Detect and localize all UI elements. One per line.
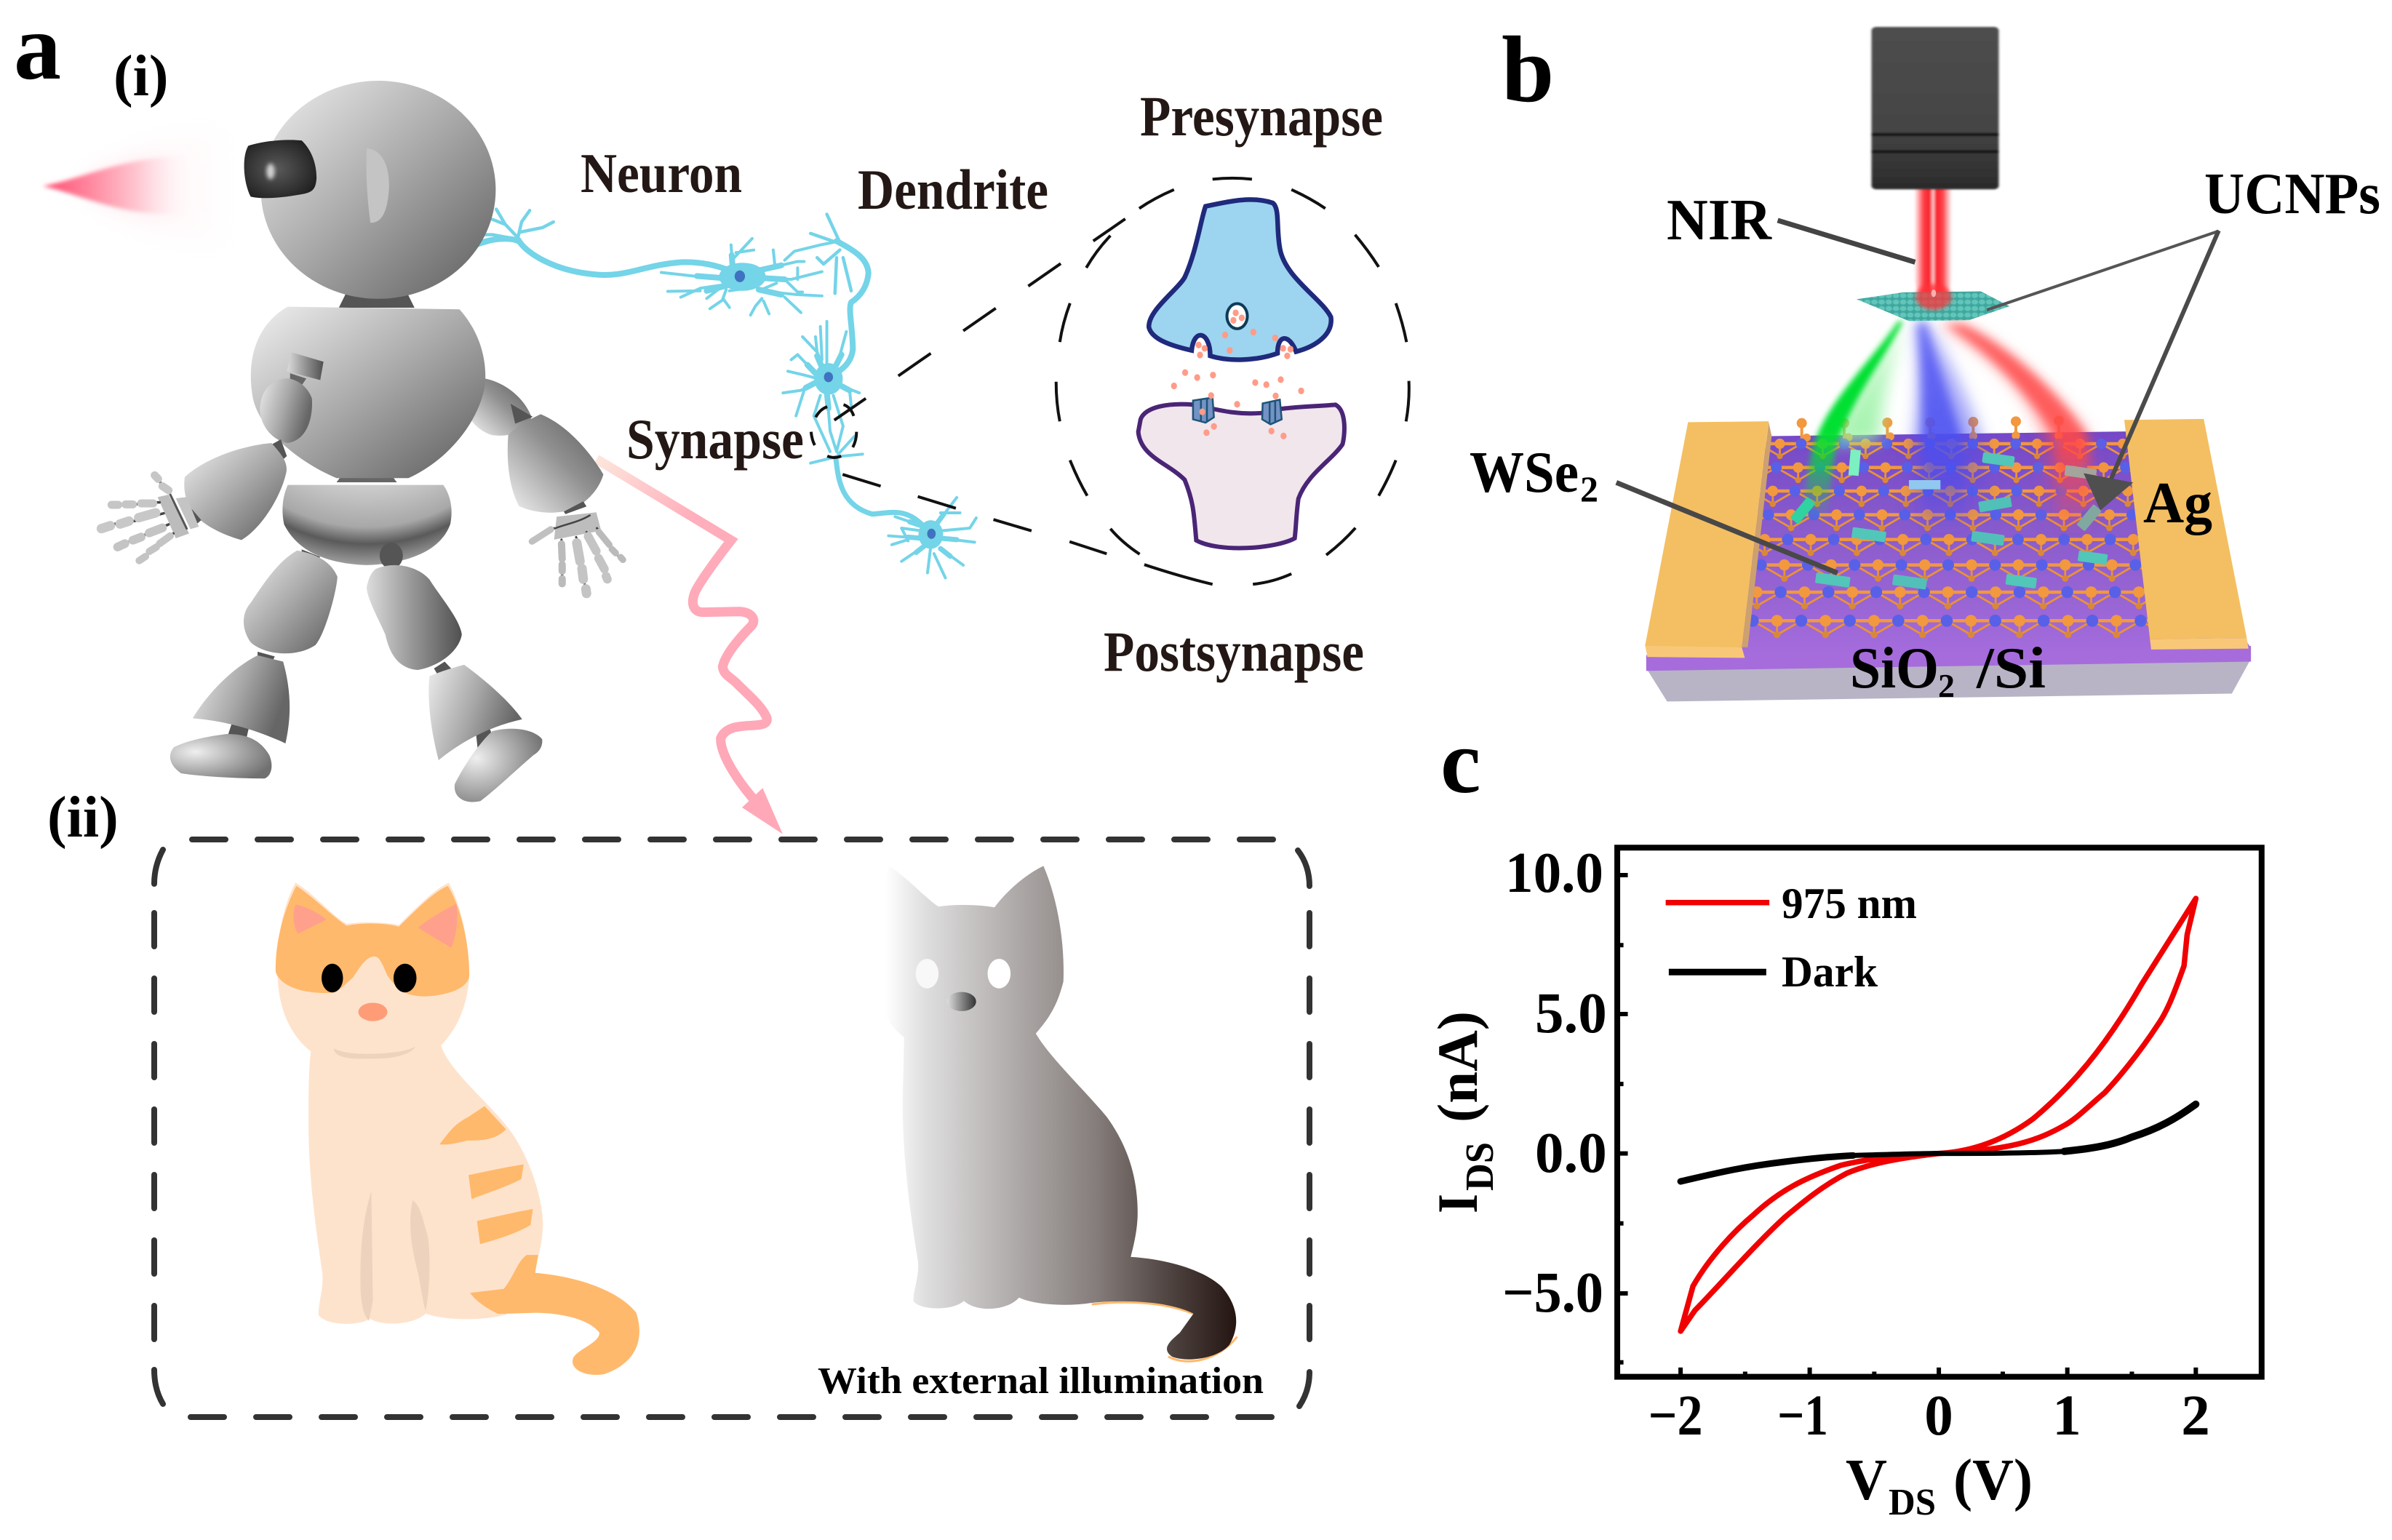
cat chin and leg shading [334,1046,430,1321]
grey silicon block [1646,659,2251,701]
robot neck [339,294,415,308]
substrate label: SiO [1850,637,1939,701]
cat eyes [322,964,343,992]
y axis tick labels: 10.0 [1505,842,1603,905]
axis ticks [1619,875,2196,1375]
y axis title: DS [1457,1142,1502,1191]
first neuron nucleus [735,271,745,282]
right Ag electrode [2124,419,2249,650]
cat body [277,882,543,1324]
neurotransmitters [1171,309,1304,439]
sub-panel label (i): (i) [113,44,169,108]
robot right foot [455,729,542,802]
panel label c: c [1440,712,1480,813]
axon from robot head [476,239,730,275]
legend black line [1669,969,1766,976]
green emission core [1802,322,1903,522]
robot left upper arm [260,378,312,443]
y axis tick labels: 0.0 [1535,1122,1607,1185]
robot left ankle [228,722,250,741]
x axis tick labels: 0 [1924,1384,1953,1448]
robot right hand [532,501,623,594]
objective lens [1872,27,1998,189]
Ag label: Ag [2143,471,2212,535]
purple oxide top [1646,431,2251,658]
coloured emission beams [1802,322,2095,533]
orange rim under tail [1092,1302,1237,1361]
postsynaptic terminal [1139,404,1344,548]
x axis title: V [1846,1448,1887,1512]
NIR laser beam [1914,188,1952,302]
wavy pink light arrow [597,459,783,834]
robot waist joint [337,476,396,482]
dark curve [1681,1104,2196,1181]
third neuron dendrites [888,498,976,578]
cat tail [470,1255,639,1375]
y axis title: I [1426,1194,1489,1213]
substrate label: 2 [1938,667,1955,704]
x axis tick labels [1649,1384,2210,1448]
synapse zoom diagram [811,178,1409,584]
robot left shoulder [287,352,324,380]
axon three [836,459,928,531]
robot ear [367,148,389,223]
presynaptic terminal [1149,199,1331,359]
synapse label: Synapse [626,407,804,471]
UCNP nanorods on lattice [1790,450,2108,589]
dashed rounded box [154,839,1309,1417]
vesicle [1227,303,1248,329]
panel label b: b [1502,17,1554,122]
third neuron body [908,514,957,556]
left Ag electrode [1645,421,1771,658]
red emission halo [1940,324,2095,533]
975 nm curve [1681,898,2196,1331]
top apical atoms [1802,420,2059,444]
legend text Dark: Dark [1782,948,1878,996]
cat nose [359,1002,388,1021]
x axis tick labels: 1 [2052,1384,2081,1448]
robot left forearm [184,443,287,540]
WSe2 label: 2 [1580,468,1598,509]
robot left shin [193,655,290,743]
y axis tick labels [1502,842,1607,1325]
illuminated grey cat [872,866,1237,1361]
substrate label: /Si [1976,637,2046,701]
axon branches near head [479,210,554,245]
robot head [261,81,495,299]
cat ears [293,903,457,948]
receptors [1193,398,1282,424]
UCNP pointer to sheet [1987,231,2219,310]
illumination caption: With external illumination [818,1360,1264,1402]
robot left hand [101,475,202,561]
second neuron dendrites [783,322,863,463]
grey cat nose [947,992,976,1011]
WSe2 pointer [1616,482,1838,573]
neuron label: Neuron [581,142,742,204]
y axis tick labels: −5.0 [1502,1261,1603,1325]
x axis title: DS [1889,1482,1936,1523]
small dashed circle on neuron [811,404,856,458]
robot [170,81,603,802]
x axis tick labels: −1 [1777,1384,1828,1448]
x axis tick labels: −2 [1649,1384,1702,1448]
laser spot on sheet [1915,284,1952,310]
x axis title [1846,1448,2033,1523]
orange cat [276,882,639,1375]
plot frame [1617,847,2262,1377]
UCNP arrow to rod [2084,231,2219,511]
presynapse label: Presynapse [1140,84,1383,148]
axon two [830,241,869,376]
x axis tick labels: 2 [2181,1384,2210,1448]
lattice rows [1690,439,2211,638]
IV chart [1617,847,2262,1377]
first neuron body [697,255,785,295]
red emission core [1944,324,2092,533]
robot waist [282,485,452,565]
green emission halo [1831,322,1902,446]
dendrite junction branches [810,215,851,293]
grey cat eyes [916,959,938,989]
y axis tick labels: 5.0 [1535,982,1607,1045]
postsynapse label: Postsynapse [1104,620,1364,683]
legend text 975 nm: 975 nm [1782,879,1917,927]
light beam from robot eye [43,131,232,247]
WSe2 lattice [1690,415,2211,638]
robot knee links [258,652,451,677]
visor highlight [266,164,275,179]
sub-panel label (ii): (ii) [47,786,119,850]
first neuron dendrites [661,239,840,315]
robot right upper arm [471,378,532,436]
UCNPs label: UCNPs [2204,162,2380,226]
cat stripes [439,1106,533,1244]
robot torso [251,307,485,478]
third neuron nucleus [928,529,936,539]
y axis title: (nA) [1426,1011,1489,1122]
y axis title [1426,1011,1502,1213]
NIR pointer [1778,220,1915,262]
cat head markings [276,886,469,997]
second neuron body [806,354,850,408]
device base layers [1646,431,2251,701]
second neuron nucleus [824,372,833,382]
zoom guide dashed lines [834,219,1213,584]
legend red line [1666,900,1769,906]
robot visor [244,140,316,198]
blue emission core [1918,322,1964,533]
robot hip joints [380,543,403,569]
robot right ankle [476,729,494,752]
robot left thigh [244,551,338,653]
purple oxide side [1646,646,2251,671]
large dashed circle [1056,178,1409,584]
substrate label [1850,637,2046,704]
robot right thigh [367,565,462,670]
NIR label: NIR [1667,188,1772,252]
x axis title: (V) [1953,1448,2033,1512]
device optics and electrodes [1616,27,2249,658]
robot right shin [428,665,522,760]
blue emission halo [1908,322,1993,533]
dendrite label: Dendrite [858,158,1048,221]
neuron chain [476,210,976,578]
robot right forearm [508,414,603,513]
grey cat silhouette [872,866,1236,1360]
WSe2 label: WSe [1470,441,1579,505]
robot left foot [170,734,271,778]
UCNP sheet [1857,292,2009,321]
